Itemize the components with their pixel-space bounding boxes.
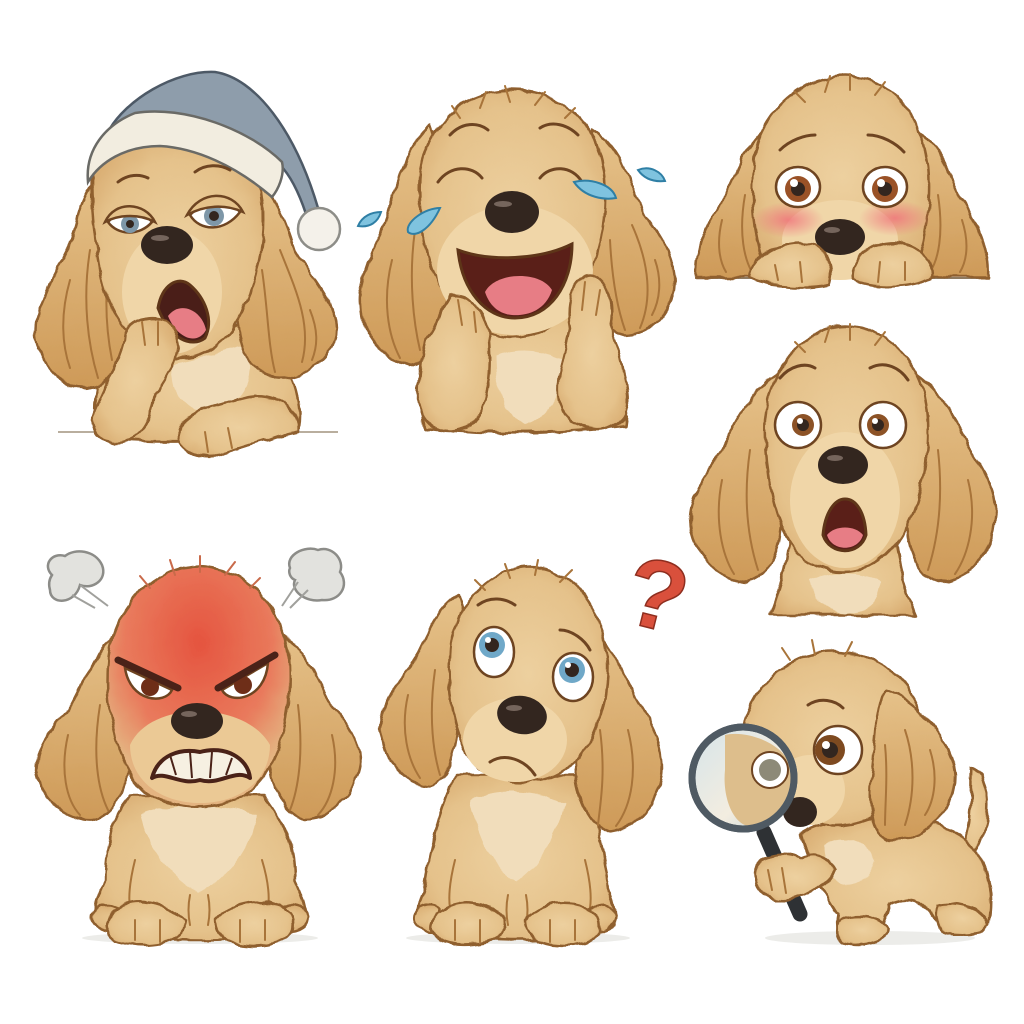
paws — [92, 905, 308, 932]
right ear — [587, 130, 675, 336]
ear — [870, 690, 955, 840]
left ear — [380, 595, 464, 786]
shadow — [765, 931, 975, 945]
head — [419, 90, 606, 338]
chest fur — [825, 840, 875, 886]
nose — [485, 191, 539, 233]
tears — [408, 208, 440, 234]
head — [743, 652, 925, 825]
body — [422, 310, 627, 433]
right ear — [903, 372, 996, 582]
right ear — [900, 125, 988, 277]
ear fur strands — [63, 250, 316, 378]
ear fur strands — [64, 705, 335, 815]
dog: angry with steam — [36, 549, 360, 946]
right ear — [265, 625, 360, 820]
muzzle — [130, 711, 270, 803]
ear fur strands — [405, 670, 633, 826]
head — [449, 566, 607, 782]
yawning paw — [92, 318, 178, 442]
head — [765, 326, 928, 571]
blush — [752, 202, 824, 238]
left steam — [48, 551, 103, 601]
body — [417, 775, 616, 940]
right ear — [575, 620, 663, 832]
nose — [494, 692, 550, 738]
ear fur strands — [719, 195, 966, 272]
left ear — [690, 372, 786, 582]
paws — [414, 904, 616, 932]
dog: laughing with tears — [358, 86, 675, 433]
front paw — [837, 916, 888, 945]
back paw — [936, 903, 988, 934]
left ear — [696, 125, 785, 277]
pompom — [298, 208, 340, 250]
left ear — [36, 625, 133, 820]
eyes — [125, 668, 172, 699]
body — [94, 795, 306, 940]
neck — [770, 540, 916, 615]
eye — [814, 726, 862, 774]
muzzle — [122, 230, 222, 354]
chest — [140, 806, 258, 892]
head — [92, 146, 264, 359]
eyes — [474, 627, 514, 677]
question mark: ? — [615, 534, 699, 655]
chest fur — [810, 572, 880, 614]
dog: sleepy yawning with nightcap — [35, 72, 340, 456]
tail — [960, 768, 988, 862]
dog: confused with question mark — [380, 534, 699, 946]
ground line — [58, 431, 338, 433]
laughing mouth — [458, 244, 572, 318]
ear fur strands — [719, 450, 972, 574]
left ear — [35, 170, 128, 387]
muzzle — [437, 205, 593, 335]
right ear — [236, 175, 336, 378]
nose — [815, 219, 865, 255]
nightcap — [108, 72, 318, 214]
shadow — [82, 932, 318, 944]
body — [95, 325, 299, 441]
hands on cheeks — [418, 294, 490, 431]
muzzle — [463, 698, 567, 782]
resting paw — [178, 396, 298, 456]
dog: shy peeking and blushing — [695, 74, 990, 288]
paws — [750, 243, 832, 288]
head — [108, 566, 290, 806]
holding paw — [755, 854, 835, 900]
cap band — [88, 111, 283, 197]
dog: surprised — [690, 324, 996, 615]
closed eyes and brows — [438, 124, 582, 182]
yawning mouth — [158, 281, 209, 342]
magnifier lens — [692, 727, 794, 829]
snarl — [152, 750, 250, 781]
nose — [141, 226, 193, 264]
magnifier handle — [764, 832, 800, 914]
table line — [695, 277, 990, 279]
nose — [783, 797, 817, 827]
chest — [470, 791, 565, 882]
eyes — [108, 213, 152, 232]
right steam — [289, 549, 344, 600]
head — [752, 76, 929, 277]
body — [800, 818, 990, 945]
eyes — [775, 402, 821, 448]
chest fur — [172, 345, 250, 413]
ear fur strands — [387, 225, 659, 358]
left ear — [360, 125, 448, 366]
chest fur — [495, 350, 565, 425]
eyes — [776, 167, 820, 207]
mouth — [490, 758, 535, 775]
open mouth — [823, 499, 866, 551]
muzzle — [782, 200, 898, 280]
nose — [171, 703, 223, 739]
muzzle — [790, 432, 900, 568]
muzzle — [775, 755, 845, 825]
shadow — [406, 932, 630, 944]
nose — [818, 446, 868, 484]
dog: investigating with magnifying glass — [692, 640, 990, 945]
